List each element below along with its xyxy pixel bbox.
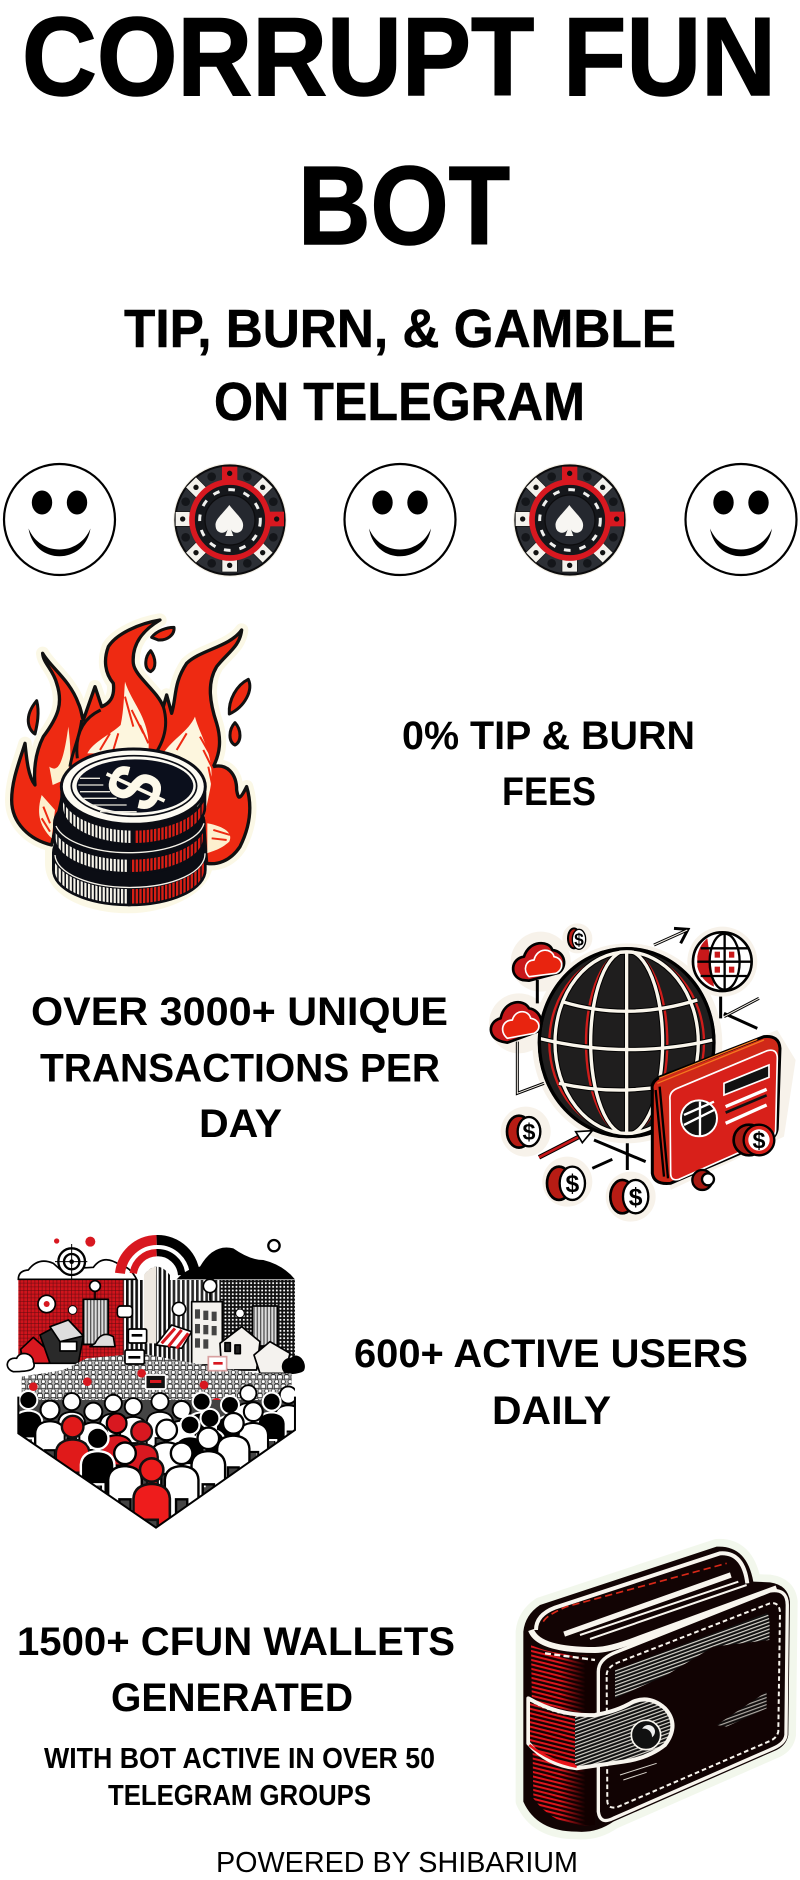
subtitle: TIP, BURN, & GAMBLE <box>124 299 676 359</box>
icon: poker chip 2 <box>513 463 627 577</box>
icon: poker chip 1 <box>173 463 287 577</box>
text: active users <box>354 1332 748 1433</box>
front face <box>598 1591 787 1821</box>
icon: globe with card and coins: $ <box>565 1171 579 1198</box>
globe <box>539 949 714 1137</box>
text: transactions: OVER 3000+ UNIQUE <box>31 990 448 1034</box>
small globe <box>693 932 752 991</box>
text: wallets generated: 1500+ CFUN WALLETS <box>17 1620 455 1664</box>
text: wallets generated <box>17 1620 455 1720</box>
text: transactions: TRANSACTIONS PER <box>40 1046 440 1090</box>
text: fees <box>402 714 695 814</box>
subtitle <box>124 299 676 432</box>
text: telegram groups: WITH BOT ACTIVE IN OVER 50 <box>44 1743 435 1775</box>
strap with button <box>528 1698 672 1768</box>
icon: crowd in city <box>7 1237 304 1546</box>
icon row: smileys and poker chips <box>4 463 796 577</box>
panel: transactions <box>31 923 796 1222</box>
icon: burning coin stack: $ <box>88 752 183 823</box>
icon: globe with card and coins: $ <box>574 930 584 950</box>
text: transactions: DAY <box>199 1102 282 1146</box>
icon: smiley 3 <box>686 464 796 575</box>
text: active users: DAILY <box>492 1389 611 1433</box>
icon: globe with card and coins: $ <box>523 1119 536 1145</box>
icon: globe with card and coins <box>489 923 796 1222</box>
title <box>22 0 776 268</box>
icon: globe with card and coins: $ <box>752 1128 765 1154</box>
icon: globe with card and coins: $ <box>629 1184 643 1211</box>
panel: zero fees <box>12 620 695 907</box>
map pins and signs <box>38 1279 244 1389</box>
coins <box>507 928 648 1213</box>
subtitle: ON TELEGRAM <box>214 372 585 432</box>
title: BOT <box>298 144 510 268</box>
droplets <box>28 627 250 745</box>
panel: active users <box>7 1237 748 1546</box>
coin stack <box>53 788 205 905</box>
buildings and houses <box>7 1299 304 1373</box>
background tiny crowd <box>22 1353 292 1403</box>
connectors and arrows <box>517 928 759 1170</box>
icon: smiley 1 <box>4 464 115 575</box>
clouds <box>491 943 564 1043</box>
text: transactions <box>31 990 448 1146</box>
text: telegram groups: TELEGRAM GROUPS <box>108 1780 371 1812</box>
text: telegram groups <box>44 1743 435 1812</box>
icon: smiley 2 <box>344 464 456 575</box>
icon: wallet <box>523 1547 790 1832</box>
text: active users: 600+ ACTIVE USERS <box>354 1332 748 1376</box>
icon: burning coin stack <box>12 620 250 907</box>
footer: powered by: POWERED BY SHIBARIUM <box>216 1847 578 1879</box>
text: fees: 0% TIP & BURN <box>402 714 695 758</box>
panel: wallets <box>17 1547 790 1832</box>
payment card <box>652 1036 780 1184</box>
text: fees: FEES <box>502 770 596 814</box>
spine <box>531 1645 595 1826</box>
sky: clouds, arc, target <box>18 1237 295 1343</box>
text: wallets generated: GENERATED <box>111 1676 353 1720</box>
crowd foreground <box>19 1384 295 1526</box>
